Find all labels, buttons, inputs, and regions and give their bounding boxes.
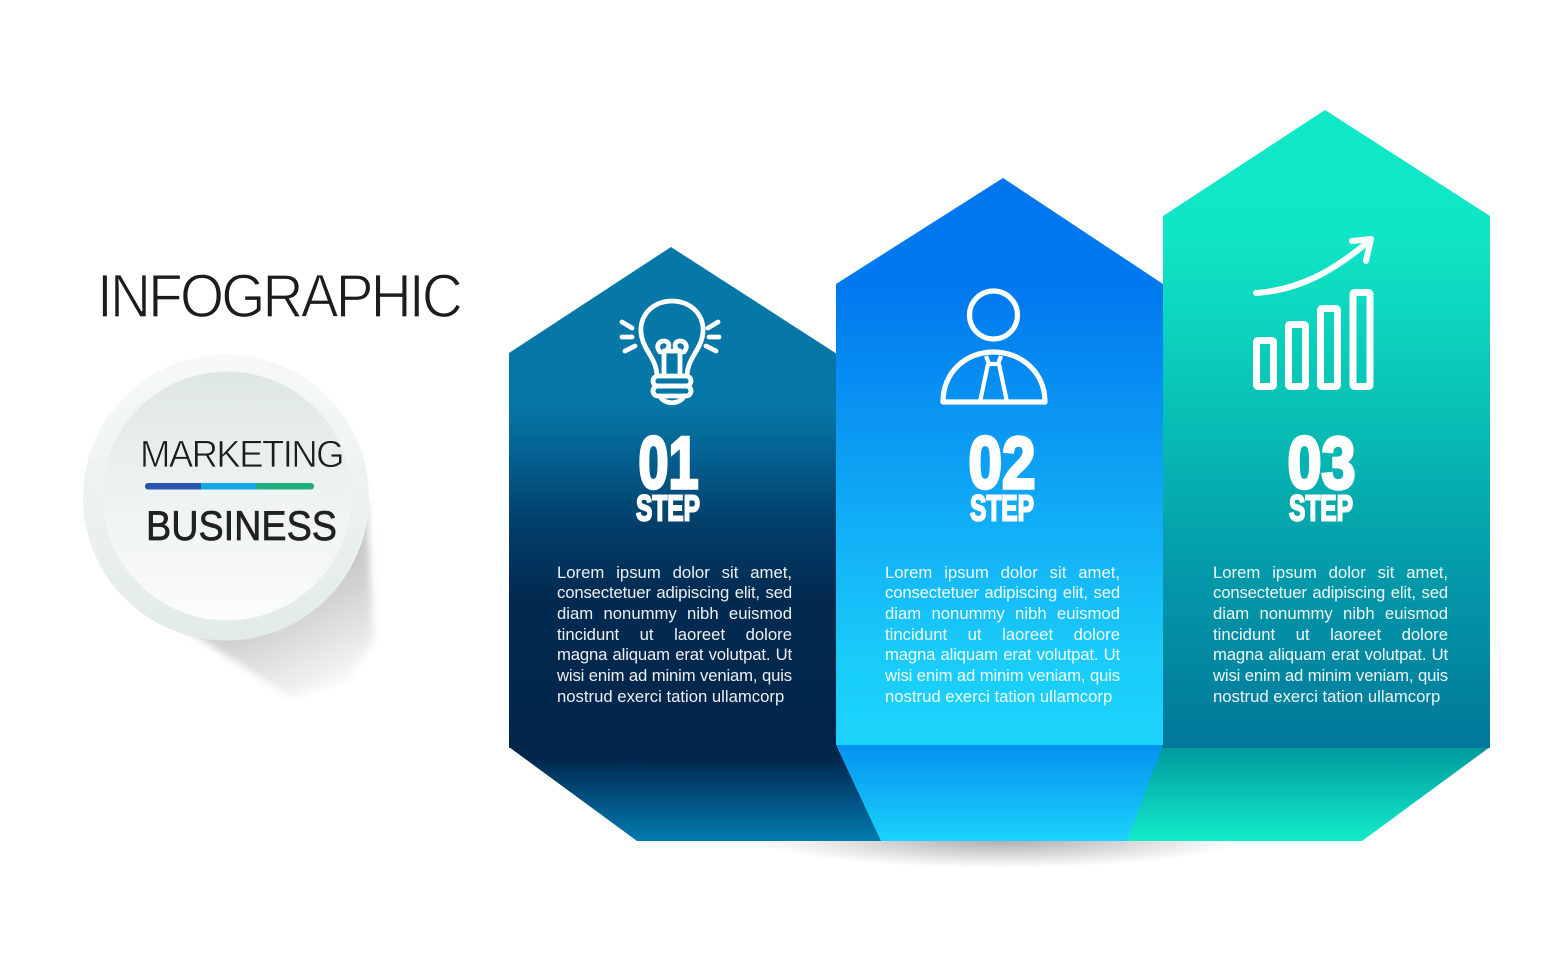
panel 2 lower fold [836, 745, 1163, 841]
text block: step 3: tincidunt ut laoreet dolore [1213, 625, 1448, 644]
badge word: business: BUSINESS [146, 502, 337, 549]
text block: step 1: wisi enim ad minim veniam, quis [557, 666, 792, 685]
step 2 number: STEP [970, 488, 1034, 528]
icon: person with tie [943, 291, 1045, 402]
text block: step 2: wisi enim ad minim veniam, quis [885, 666, 1120, 685]
text block: step 3: Lorem ipsum dolor sit amet, [1213, 562, 1448, 582]
text block: step 1: tincidunt ut laoreet dolore [557, 625, 792, 644]
badge: marketing business [83, 354, 374, 698]
text block: step 1: magna aliquam erat volutpat. Ut [557, 645, 792, 664]
badge long shadow [175, 500, 374, 698]
text block: step 1: Lorem ipsum dolor sit amet, [557, 562, 792, 582]
step 3 number: STEP [1289, 488, 1353, 528]
step 2 number: 02 [968, 423, 1036, 504]
text block: step 2: magna aliquam erat volutpat. Ut [885, 645, 1120, 664]
text block: step 3: magna aliquam erat volutpat. Ut [1213, 645, 1448, 664]
badge outer ring [83, 354, 369, 640]
text block: step 3 [1213, 562, 1448, 706]
panel 3 lower fold [1110, 747, 1490, 841]
panel 1 arrow [509, 247, 837, 748]
text block: step 2: diam nonummy nibh euismod [885, 604, 1120, 623]
icon: rising bar chart [1256, 239, 1371, 386]
panel 3 arrow [1162, 110, 1490, 748]
badge inner disc [102, 372, 352, 620]
floor shadow [755, 840, 1245, 870]
step 3 number: 03 [1288, 423, 1356, 504]
text block: step 2: consectetuer adipiscing elit, sed [885, 583, 1120, 602]
step 3 number [1288, 423, 1356, 528]
step 1 number [636, 423, 700, 528]
text block: step 1: nostrud exerci tation ullamcorp [557, 687, 784, 706]
badge word: marketing: MARKETING [140, 434, 343, 476]
step 2 number [968, 423, 1036, 528]
text block: step 2: Lorem ipsum dolor sit amet, [885, 562, 1120, 582]
title: INFOGRAPHIC [97, 262, 461, 330]
text block: step 2: nostrud exerci tation ullamcorp [885, 687, 1112, 706]
step 1 number: 01 [638, 423, 698, 504]
badge tricolor divider [145, 483, 314, 490]
text block: step 3: consectetuer adipiscing elit, sed [1213, 583, 1448, 602]
text block: step 1: diam nonummy nibh euismod [557, 604, 792, 623]
text block: step 3: wisi enim ad minim veniam, quis [1213, 666, 1448, 685]
text block: step 2 [885, 562, 1120, 706]
text block: step 3: diam nonummy nibh euismod [1213, 604, 1448, 623]
panel 2 arrow [836, 178, 1163, 745]
text block: step 2: tincidunt ut laoreet dolore [885, 625, 1120, 644]
text block: step 3: nostrud exerci tation ullamcorp [1213, 687, 1440, 706]
panel 1 lower fold [509, 747, 900, 841]
step 1 number: STEP [636, 488, 700, 528]
icon: light bulb [622, 301, 719, 403]
text block: step 1 [557, 562, 792, 706]
text block: step 1: consectetuer adipiscing elit, sed [557, 583, 792, 602]
